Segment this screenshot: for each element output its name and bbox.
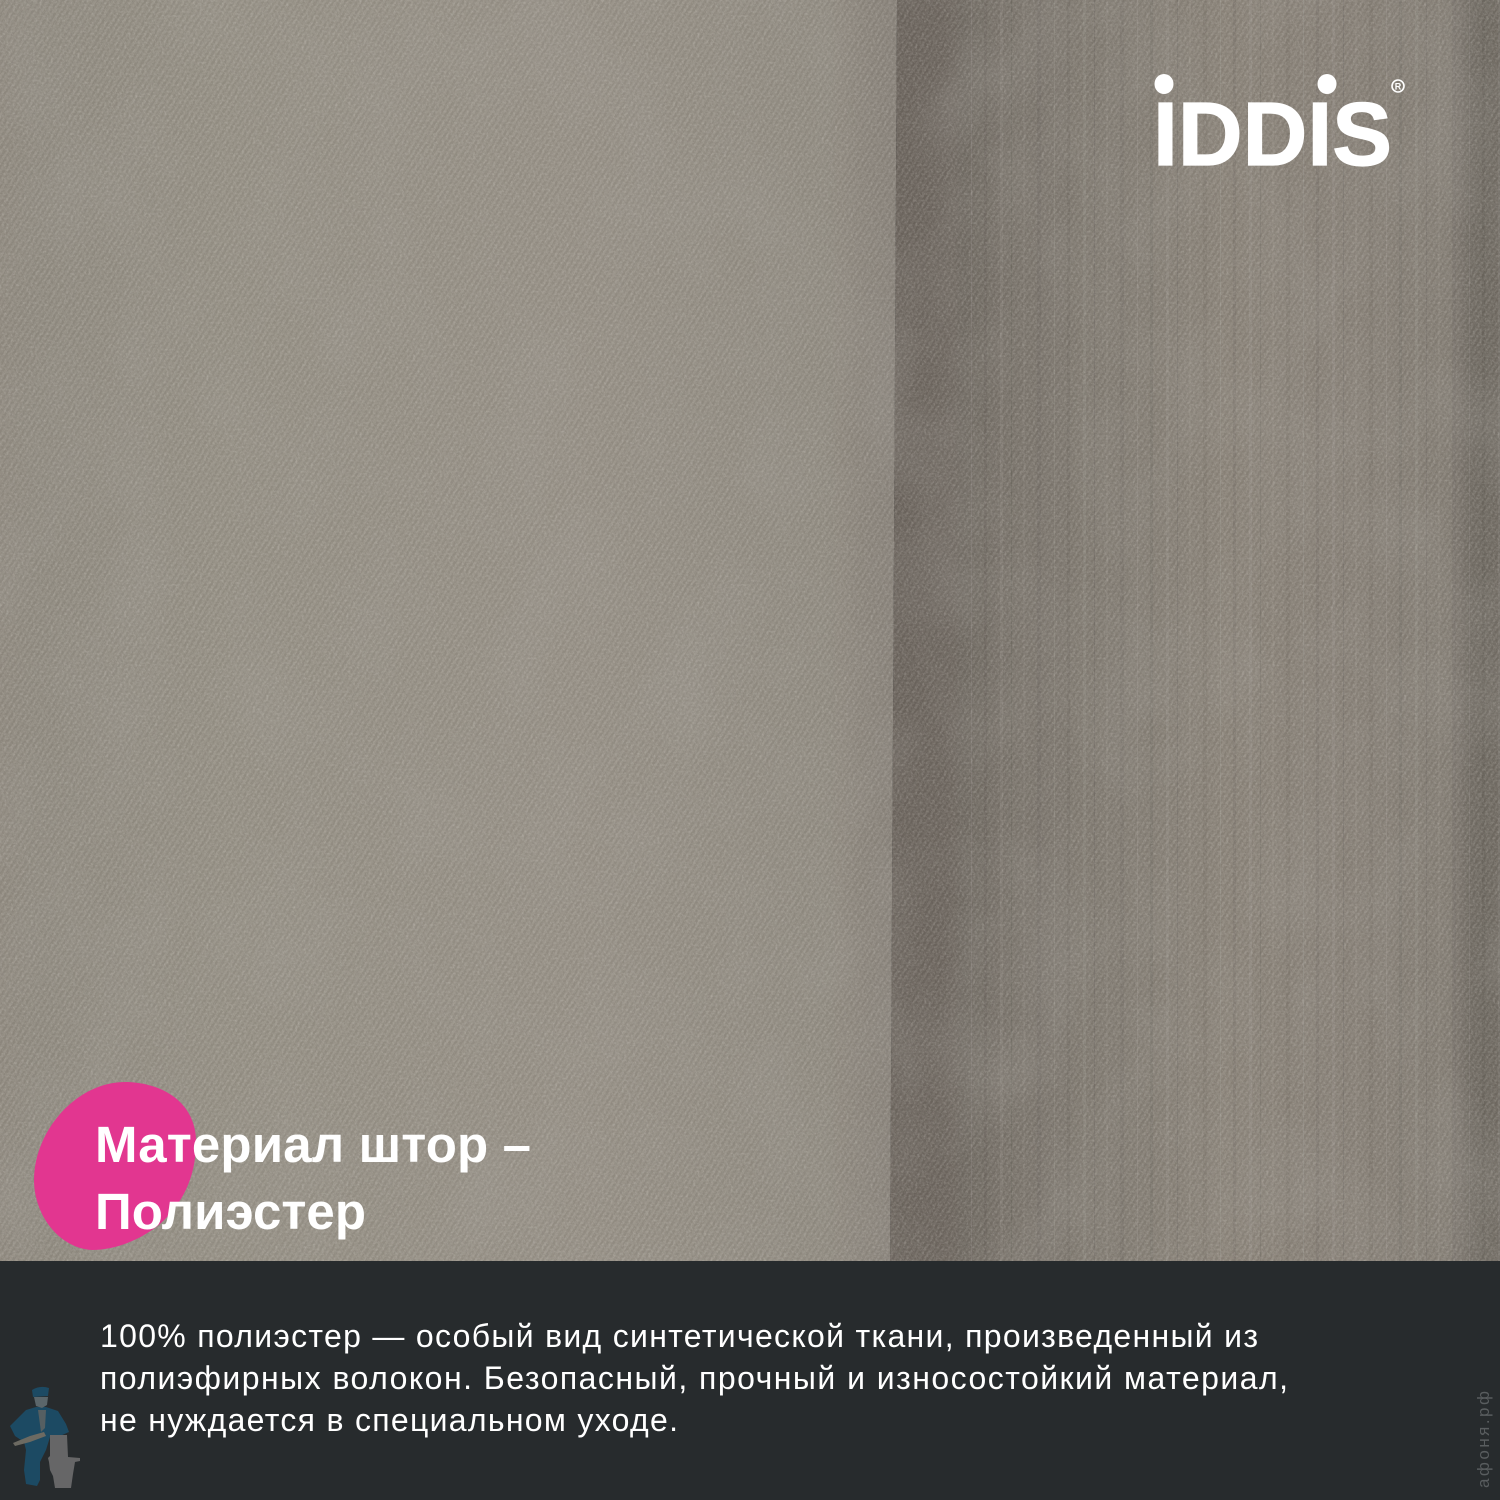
pink blob accent	[34, 1082, 196, 1250]
logo dot one	[1154, 74, 1174, 94]
registered mark: R	[1395, 82, 1402, 92]
logo: IDDIS	[1153, 74, 1404, 185]
panel: right curtain fold	[890, 0, 1500, 1261]
description text	[100, 1318, 1288, 1438]
fabric vertical streaks on right fold	[960, 0, 1500, 1261]
logo dot two	[1318, 74, 1336, 94]
panel: dark description bar	[0, 1261, 1500, 1500]
watermark: site name: афоня.рф	[1474, 1391, 1493, 1488]
description line three: не нуждается в специальном уходе.	[100, 1402, 678, 1438]
description line one: 100% полиэстер — особый вид синтетической ткани, произведенный из	[100, 1318, 1258, 1354]
plumber wrench	[13, 1432, 46, 1446]
plumber figure	[10, 1387, 69, 1486]
toilet	[48, 1435, 80, 1488]
heading line two: Полиэстер	[95, 1183, 366, 1240]
plumber shirt and bow tie	[38, 1410, 46, 1432]
registered mark	[1392, 80, 1404, 92]
icon: plumber with toilet	[10, 1387, 80, 1488]
panel: left curtain fold	[0, 0, 897, 1261]
heading	[95, 1116, 531, 1240]
logo wordmark: IDDIS	[1153, 85, 1392, 185]
description line two: полиэфирных волокон. Безопасный, прочный и износостойкий материал,	[100, 1360, 1288, 1396]
plumber face	[34, 1397, 48, 1408]
heading line one: Материал штор –	[95, 1116, 531, 1173]
